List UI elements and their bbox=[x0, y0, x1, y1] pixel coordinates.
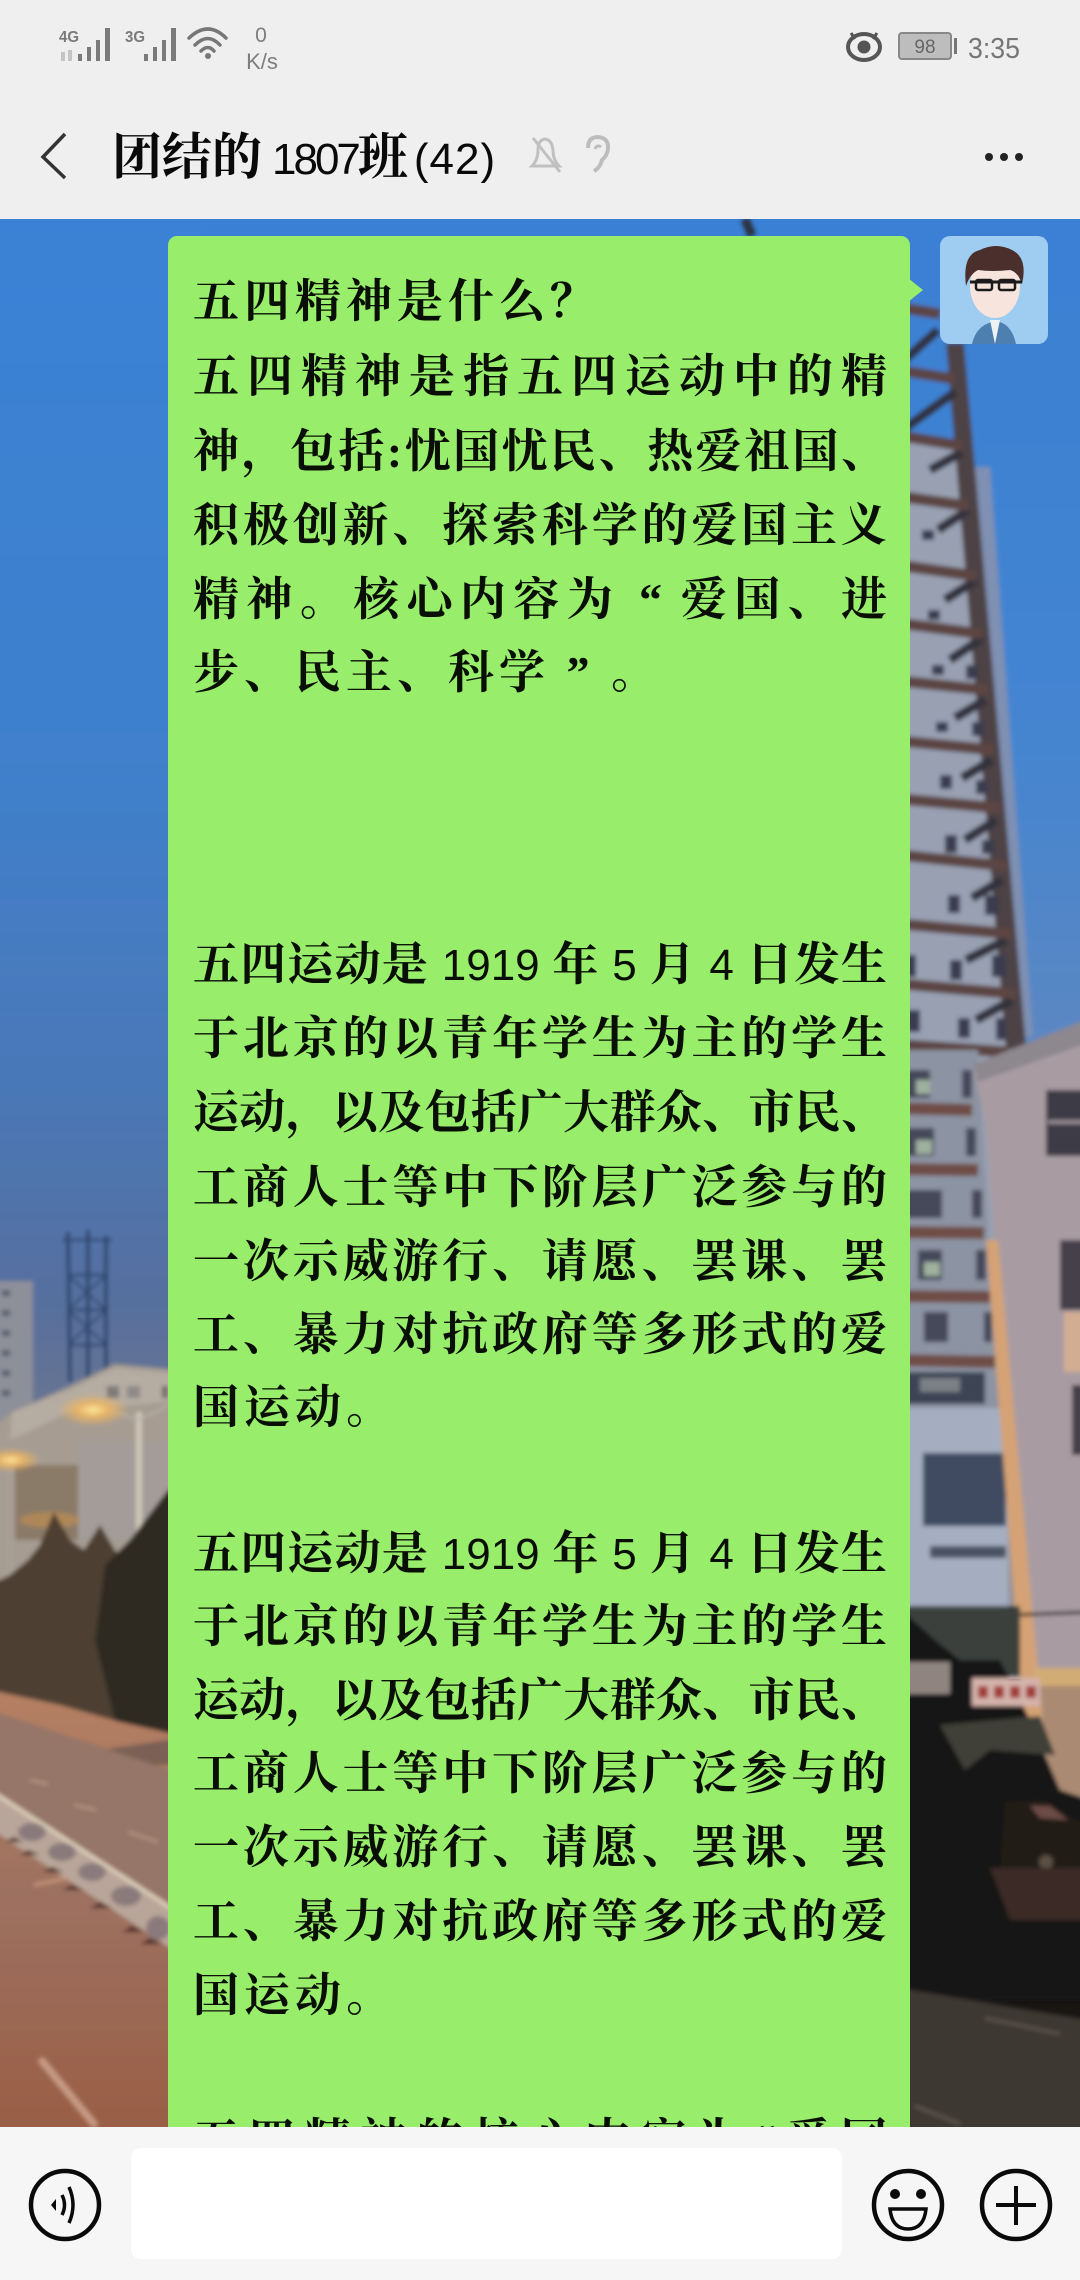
text block: May Fourth movement paragraph repeated: 五四运动是 1919 年 5 月 4 日发生 bbox=[193, 1528, 887, 1579]
icons: muted bell and ear bbox=[528, 135, 610, 173]
text block: May Fourth movement paragraph: 国运动。 bbox=[193, 1382, 397, 1433]
status bar icons bbox=[59, 24, 1020, 74]
text block: May Fourth movement paragraph bbox=[193, 939, 887, 1433]
text block: May Fourth movement paragraph: 于北京的以青年学生为主的学生 bbox=[193, 1013, 887, 1064]
icon: user avatar bbox=[940, 236, 1048, 344]
left low building bbox=[0, 1364, 200, 1580]
text block: what is the May Fourth spirit: 五四精神是指五四运动中的精 bbox=[193, 351, 887, 402]
tower braces bbox=[900, 330, 1012, 1020]
status bar icons: 3:35 bbox=[968, 33, 1020, 65]
left tall building bbox=[0, 1281, 33, 1541]
right tower panels bbox=[880, 440, 1012, 1400]
text block: what is the May Fourth spirit: 精神。核心内容为 “ 爱国、进 bbox=[193, 574, 887, 625]
barrier bbox=[0, 1790, 200, 1968]
status bar icons: 98 bbox=[914, 37, 936, 58]
text block: what is the May Fourth spirit: 五四精神是什么？ bbox=[193, 276, 601, 327]
input field bbox=[131, 2148, 842, 2259]
text block: May Fourth movement paragraph repeated: 国运动。 bbox=[193, 1970, 397, 2021]
text block: what is the May Fourth spirit: 步、民主、科学 ” 。 bbox=[193, 647, 662, 698]
bubble tail bbox=[908, 278, 923, 302]
top tower tip bbox=[745, 219, 752, 236]
text block: May Fourth movement paragraph: 五四运动是 1919 年 5 月 4 日发生 bbox=[193, 939, 887, 990]
text block: May Fourth movement paragraph repeated: 一次示威游行、请愿、罢课、罢 bbox=[193, 1822, 887, 1873]
left trees bbox=[0, 1480, 200, 1740]
status bar icons: K/s bbox=[246, 49, 278, 74]
panel: top bar bbox=[0, 0, 1080, 219]
text block: May Fourth movement paragraph repeated: 工、暴力对抗政府等多形式的爱 bbox=[193, 1896, 887, 1947]
icon: plus bbox=[980, 2168, 1052, 2242]
right road bbox=[880, 1985, 1080, 2140]
lattice tower bbox=[62, 1230, 112, 1382]
text block: clipped last line: 五四精神的核心内容为“爱国 bbox=[193, 2115, 887, 2166]
text block: May Fourth movement paragraph repeated: 工商人士等中下阶层广泛参与的 bbox=[193, 1748, 887, 1799]
text block: May Fourth movement paragraph: 工商人士等中下阶层广泛参与的 bbox=[193, 1162, 887, 1213]
text block: May Fourth movement paragraph repeated bbox=[193, 1528, 887, 2021]
text block: May Fourth movement paragraph: 工、暴力对抗政府等多形式的爱 bbox=[193, 1309, 887, 1360]
sign board bbox=[972, 1678, 1040, 1706]
icon: emoji bbox=[872, 2168, 944, 2242]
text block: May Fourth movement paragraph repeated: 于北京的以青年学生为主的学生 bbox=[193, 1601, 887, 1652]
road marking bbox=[42, 2061, 94, 2124]
panel: bottom input bar bbox=[0, 2127, 1080, 2280]
icon: voice bbox=[28, 2168, 102, 2242]
tower beams bbox=[890, 306, 1016, 1052]
right front building bbox=[974, 1022, 1080, 1810]
title: group name: 团结的1807班(42) bbox=[112, 129, 496, 185]
text block: May Fourth movement paragraph: 一次示威游行、请愿、罢课、罢 bbox=[193, 1236, 887, 1287]
text block: what is the May Fourth spirit: 积极创新、探索科学的爱国主义 bbox=[193, 500, 887, 551]
lower tower section bbox=[880, 1050, 1010, 1620]
street lamps bbox=[136, 1412, 142, 1532]
right rear building bbox=[972, 467, 1033, 1050]
left road bbox=[0, 1690, 200, 2140]
icon: more menu bbox=[985, 153, 1023, 161]
panel: green chat bubble bbox=[168, 236, 910, 2156]
tower frame diagonal bbox=[946, 343, 1026, 1050]
status bar icons: 3G bbox=[125, 29, 145, 46]
right dark ground foliage bbox=[880, 1606, 1020, 1676]
status bar icons: 4G bbox=[59, 29, 79, 46]
status bar icons: 0 bbox=[255, 24, 267, 47]
text block: May Fourth movement paragraph repeated: 运动，以及包括广大群众、市民、 bbox=[193, 1675, 887, 1726]
text block: May Fourth movement paragraph: 运动，以及包括广大群众、市民、 bbox=[193, 1087, 887, 1138]
car bbox=[1000, 1800, 1080, 1870]
text block: what is the May Fourth spirit bbox=[193, 276, 887, 698]
icon: back arrow bbox=[40, 132, 66, 180]
text block: what is the May Fourth spirit: 神，包括:忧国忧民、热爱祖国、 bbox=[193, 426, 887, 477]
